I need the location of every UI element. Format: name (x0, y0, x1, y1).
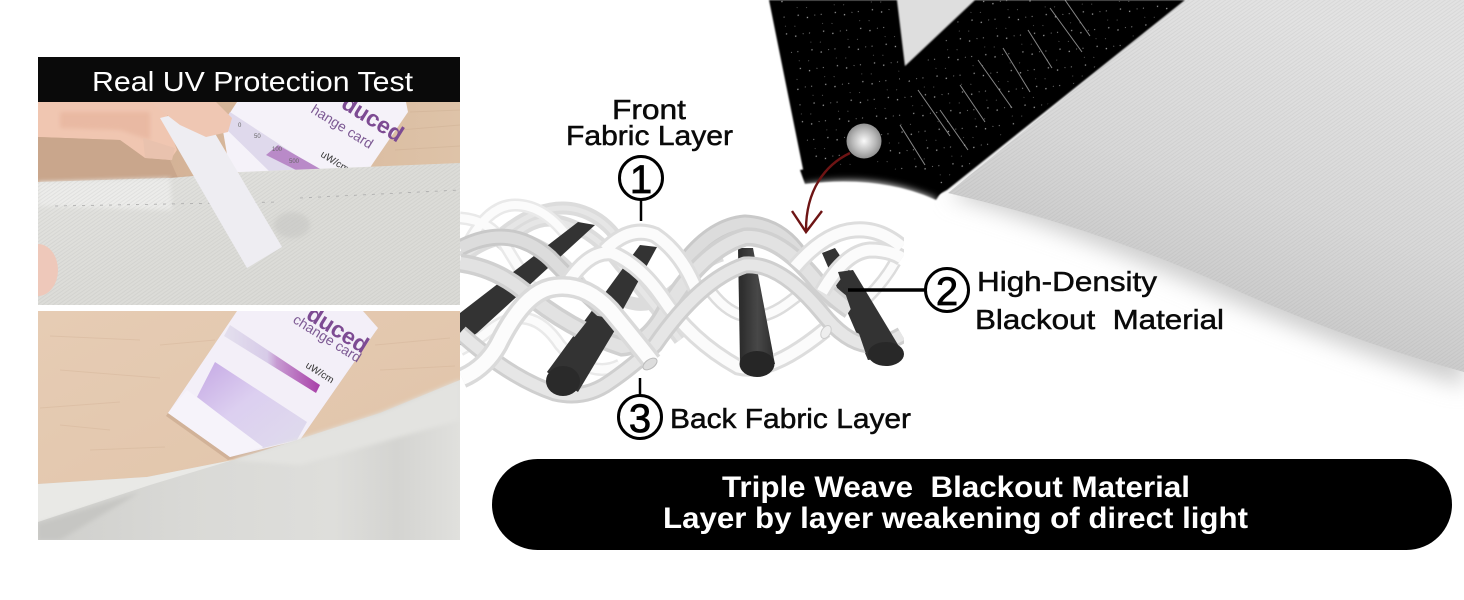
photo: UV card covered by fabric: 50 (254, 134, 261, 140)
black blackout yarns (460, 222, 870, 373)
lower back fabric strand (460, 265, 902, 395)
arrow: from sphere to weave (792, 153, 850, 232)
icon: number 1 (620, 156, 662, 202)
icon: number 2: 2 (936, 270, 958, 314)
test strip (160, 108, 282, 268)
chart: triple weave diagram (460, 205, 904, 396)
icon: number 3 (618, 396, 662, 441)
label 1: front fabric layer: Fabric Layer (566, 120, 733, 151)
callout: triple weave blackout material: Triple Weave Blackout Material (722, 471, 1190, 504)
label 2: high-density blackout material: High-Density (977, 266, 1157, 297)
photo: UV card showing colour change: duced (302, 300, 374, 358)
icon: number 3: 3 (629, 397, 651, 441)
label 2: high-density blackout material: Blackout Material (975, 304, 1224, 335)
hand (38, 102, 180, 160)
panel: real UV protection test (18, 57, 460, 540)
callout: triple weave blackout material (492, 459, 1452, 550)
photo: UV card covered by fabric: uW/cm (318, 149, 351, 175)
callout: triple weave blackout material: Layer by layer weakening of direct light (663, 502, 1248, 535)
photo: UV card covered by fabric: 0 (238, 123, 242, 129)
label 1: front fabric layer: Front (612, 94, 686, 125)
label 3: back fabric layer (618, 378, 911, 441)
near ends of black yarns (546, 270, 904, 396)
front fabric strands (460, 214, 804, 317)
photo: UV card covered by fabric: 500 (289, 159, 300, 165)
label 3: back fabric layer: Back Fabric Layer (670, 403, 911, 434)
icon: number 2 (926, 268, 968, 314)
label 1: front fabric layer (566, 94, 733, 221)
icon: number 1: 1 (630, 158, 652, 202)
photo: UV card showing colour change: change card (290, 311, 364, 365)
photo: UV card covered by fabric: 100 (272, 147, 283, 153)
front white strand with cut end (462, 286, 652, 378)
icon: metal sphere (846, 124, 882, 158)
heading bar (38, 57, 460, 102)
fabric (38, 163, 460, 305)
photo: fabric corner with blackout lining (769, 0, 1464, 386)
photo: UV card showing colour change (38, 300, 460, 540)
photo: UV card showing colour change: uW/cm (303, 360, 336, 386)
photo: UV card covered by fabric (38, 102, 460, 305)
photo: UV card covered by fabric: duced (337, 89, 409, 147)
back weave strands (462, 208, 895, 350)
photo: UV card covered by fabric: hange card (308, 101, 376, 152)
label 2: high-density blackout material (848, 266, 1224, 335)
heading bar: Real UV Protection Test (92, 66, 413, 97)
